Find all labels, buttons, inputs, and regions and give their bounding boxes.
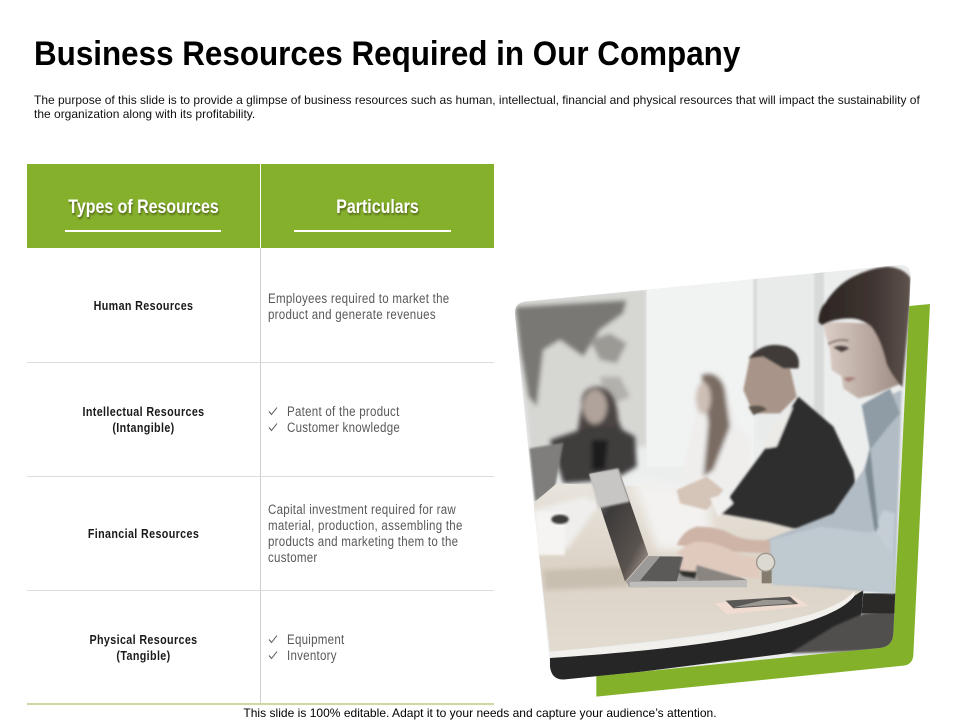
row list: intellectual resources — [268, 404, 400, 435]
intro text — [34, 93, 920, 121]
panel: resources table — [27, 164, 494, 705]
table — [533, 483, 863, 652]
row list: intellectual resources: Customer knowledge — [287, 420, 400, 435]
panel: office photo with green backing — [515, 265, 930, 697]
title: Business Resources Required in Our Company — [34, 35, 740, 73]
hands — [677, 527, 772, 578]
facial features — [828, 340, 856, 382]
intro text: the organization along with its profitability. — [34, 107, 255, 121]
wall map — [513, 288, 647, 450]
man in suit — [677, 345, 858, 532]
row text: financial resources: Capital investment required for raw — [268, 502, 456, 517]
laptop — [589, 468, 747, 587]
row label: intellectual resources: Intellectual Resources — [82, 404, 205, 419]
row text: financial resources — [268, 502, 463, 565]
row list: physical resources: Inventory — [287, 648, 337, 663]
sleeve — [770, 527, 895, 593]
row label: physical resources — [89, 632, 198, 663]
rear laptop — [529, 443, 563, 502]
blonde woman — [694, 370, 734, 478]
foreground woman hair — [818, 267, 911, 387]
row list: physical resources: Equipment — [287, 632, 344, 647]
table header: particulars: Particulars — [336, 197, 419, 218]
table header: types of resources: Types of Resources — [68, 197, 219, 218]
phone — [715, 596, 809, 614]
footer note: This slide is 100% editable. Adapt it to your needs and capture your audience’s attention. — [243, 706, 717, 720]
row label: physical resources: (Tangible) — [116, 648, 171, 663]
row label: financial resources: Financial Resources — [88, 526, 199, 541]
row label: physical resources: Physical Resources — [89, 632, 198, 647]
watch — [757, 553, 775, 583]
row text: financial resources: customer — [268, 550, 318, 565]
chair — [790, 610, 897, 653]
green backing shape — [596, 304, 930, 697]
row text: human resources — [268, 291, 449, 322]
photo — [515, 265, 911, 680]
row text: financial resources: products and marketing them to the — [268, 534, 458, 549]
row list: physical resources — [268, 632, 344, 663]
row list: intellectual resources: Patent of the product — [287, 404, 400, 419]
foreground woman shirt — [767, 388, 902, 593]
table dark edge — [550, 590, 863, 683]
row text: financial resources: material, production, assembling the — [268, 518, 463, 533]
blurred woman left — [550, 387, 637, 483]
row label: intellectual resources: (Intangible) — [112, 420, 175, 435]
table header: particulars — [261, 164, 494, 248]
row text: human resources: Employees required to market the — [268, 291, 449, 306]
row label: intellectual resources — [82, 404, 205, 435]
table header: types of resources — [27, 164, 260, 248]
row label: human resources: Human Resources — [94, 298, 193, 313]
foreground woman face — [822, 322, 902, 398]
intro text: The purpose of this slide is to provide a glimpse of business resources such as human, intellectual, financial and physical resources that will impact the sustainability of — [34, 93, 920, 107]
row text: human resources: product and generate revenues — [268, 307, 436, 322]
